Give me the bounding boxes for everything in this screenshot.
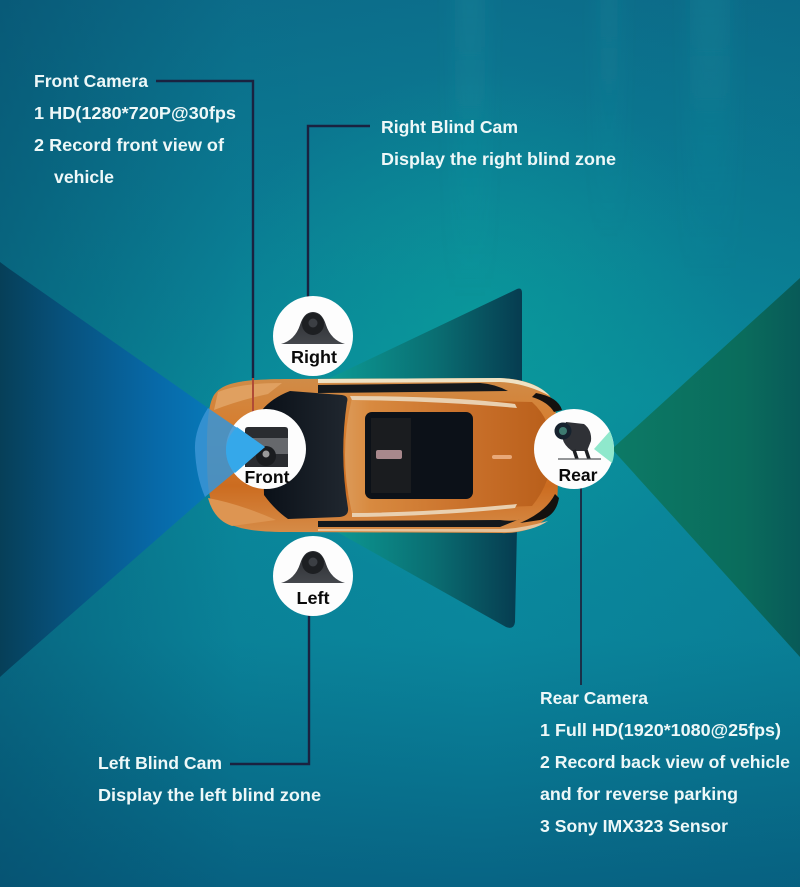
front camera light beam: [195, 408, 265, 497]
callout: left blind camera: [98, 753, 321, 805]
right camera badge: Right: [291, 347, 337, 367]
callout: front camera: 1 HD(1280*720P@30fps: [34, 103, 236, 123]
sunroof: [365, 412, 473, 499]
hood highlights: [214, 383, 282, 410]
left blind zone cone: [330, 528, 517, 628]
rear corners: [532, 393, 562, 412]
callout: rear camera: and for reverse parking: [540, 784, 738, 804]
icon: side camera: [281, 312, 345, 344]
rear camera badge: [534, 409, 614, 489]
callout: right blind camera: Right Blind Cam: [381, 117, 518, 137]
rear handle: [492, 455, 512, 459]
icon: rear camera: [554, 422, 601, 459]
callout: front camera: 2 Record front view of: [34, 135, 224, 155]
front camera badge: Front: [244, 467, 290, 487]
front camera badge: [226, 409, 306, 489]
icon: side camera: [281, 551, 345, 583]
callout: right blind camera: Display the right blind zone: [381, 149, 616, 169]
right blind camera leader line: [308, 126, 370, 298]
callout: rear camera: 1 Full HD(1920*1080@25fps): [540, 720, 781, 740]
interior detail: [376, 450, 402, 459]
callout: rear camera: 2 Record back view of vehicle: [540, 752, 790, 772]
front camera leader over car: [252, 378, 254, 416]
callout: front camera: [34, 71, 236, 187]
upper roof rail: [350, 396, 517, 408]
left camera badge: [273, 536, 353, 616]
callout: rear camera: [540, 688, 790, 836]
rear camera view cone: [612, 278, 800, 657]
icon: dash camera: [245, 427, 288, 467]
front camera view cone: [0, 262, 240, 677]
callout: front camera: vehicle: [54, 167, 114, 187]
lower roof rail: [352, 504, 517, 517]
lower side window strip: [318, 519, 520, 527]
bottom edge trim: [318, 521, 548, 532]
front camera leader line: [156, 81, 253, 378]
callout: left blind camera: Left Blind Cam: [98, 753, 222, 773]
callout: left blind camera: Display the left blind zone: [98, 785, 321, 805]
rear camera light beam: [594, 431, 614, 463]
car top view: [207, 378, 562, 533]
upper side window strip: [318, 383, 508, 393]
right camera badge: [273, 296, 353, 376]
callout: rear camera: Rear Camera: [540, 688, 648, 708]
left blind camera leader line: [230, 612, 309, 764]
rear camera leader line: [580, 486, 582, 685]
callout: rear camera: 3 Sony IMX323 Sensor: [540, 816, 728, 836]
windshield: [262, 391, 348, 519]
right blind zone cone: [330, 289, 522, 385]
callout: right blind camera: [381, 117, 616, 169]
top edge trim: [318, 378, 550, 396]
left camera badge: Left: [296, 588, 330, 608]
car body: [207, 378, 558, 533]
callout: front camera: Front Camera: [34, 71, 148, 91]
roof panel: [345, 398, 552, 513]
rear camera badge: Rear: [558, 465, 598, 485]
